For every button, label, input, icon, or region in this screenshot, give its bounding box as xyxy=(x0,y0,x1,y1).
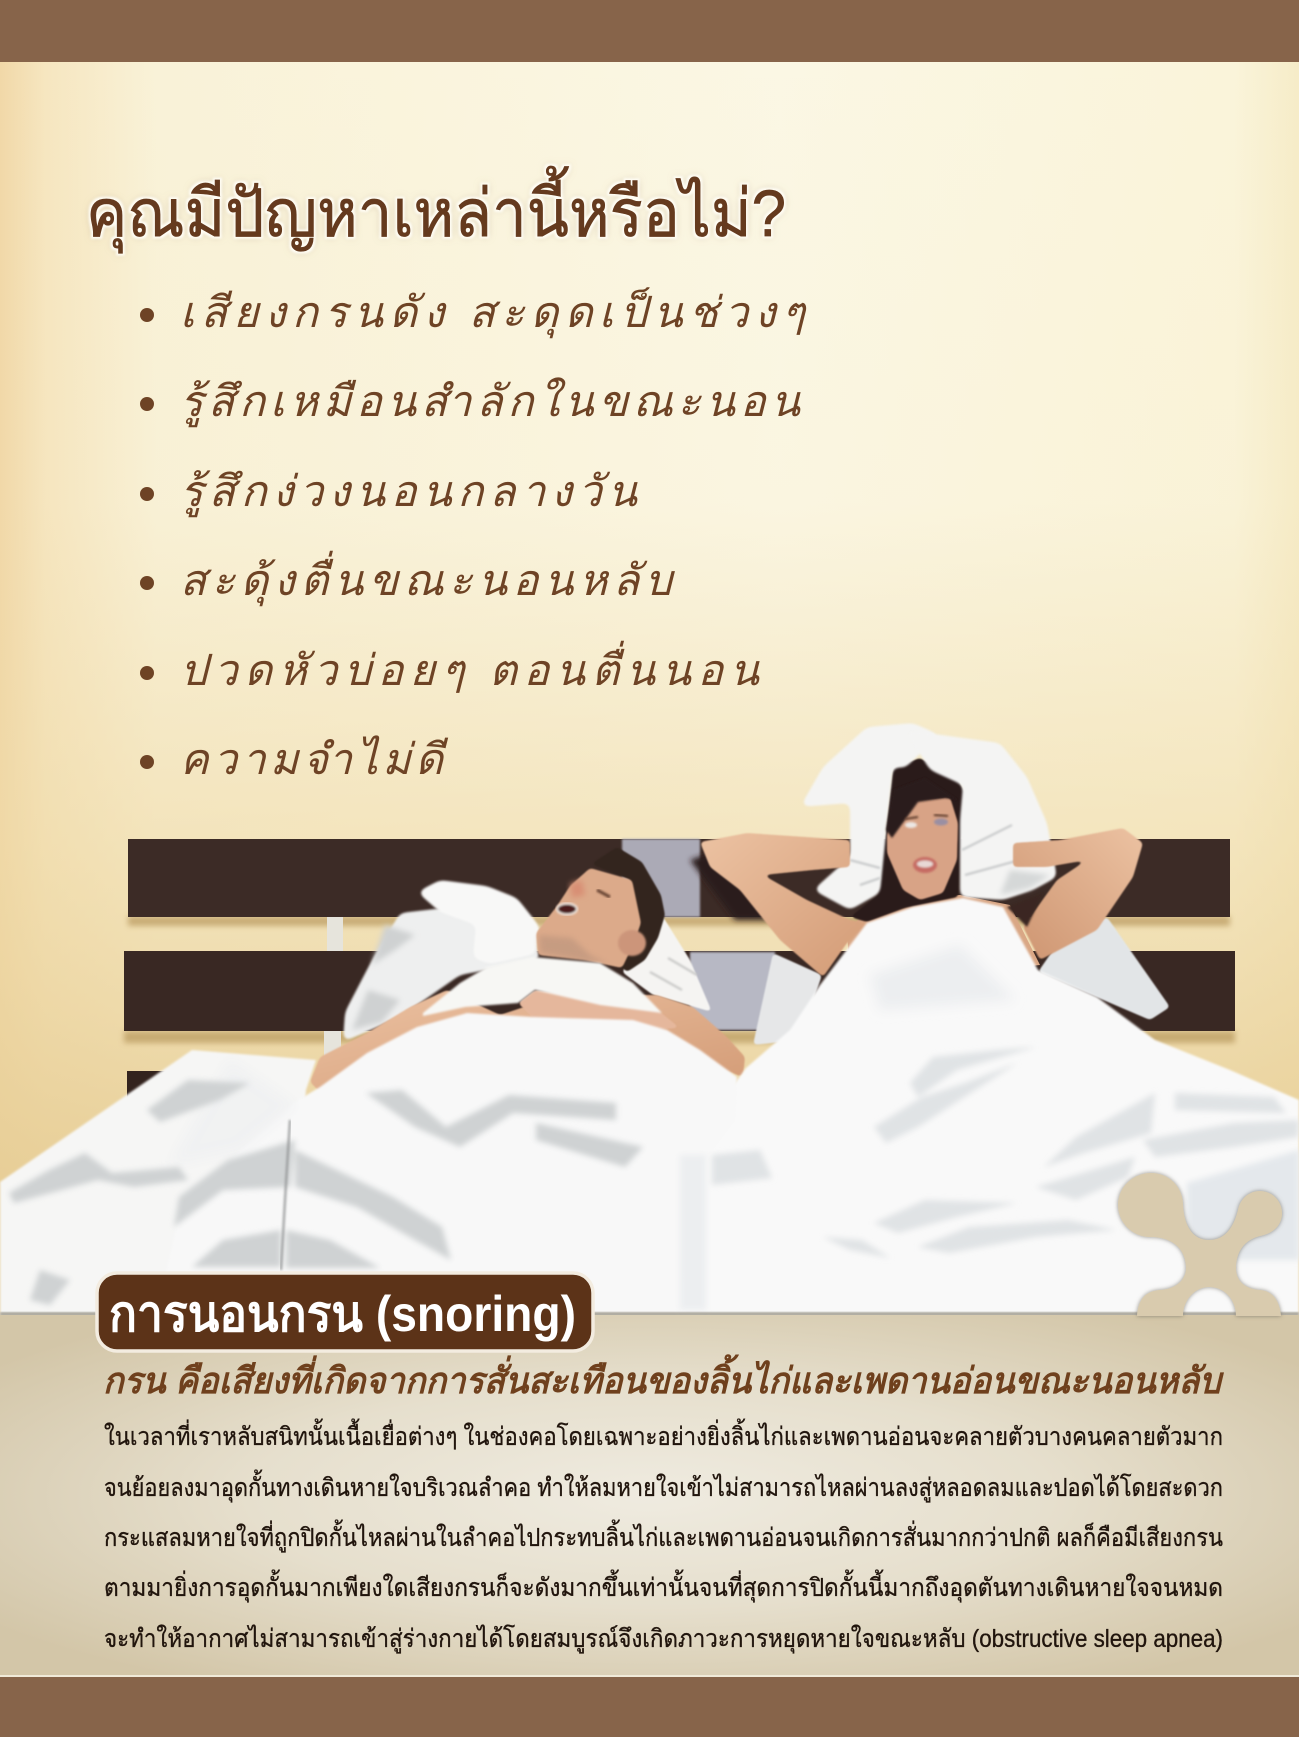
man back pillow xyxy=(343,905,540,1042)
body paragraph xyxy=(104,1418,1223,1654)
woman head pillow left xyxy=(800,723,940,910)
symptom 1: เสียงกรนดัง สะดุดเป็นช่วงๆ xyxy=(180,287,807,339)
woman left arm xyxy=(700,833,867,977)
panel: explanation background xyxy=(0,1315,1299,1677)
man hair xyxy=(591,847,665,972)
headboard slat 3 xyxy=(127,1071,177,1103)
man mouth xyxy=(557,904,577,914)
man right pillow xyxy=(622,912,712,1012)
woman torso xyxy=(847,895,1040,985)
woman mouth xyxy=(913,857,937,873)
headboard posts xyxy=(324,915,343,1058)
wall shadow below slats xyxy=(124,916,1235,1043)
duvet man xyxy=(155,1013,737,1320)
man hand xyxy=(518,990,680,1030)
puzzle cut-out shape xyxy=(1118,1173,1282,1316)
woman back pillows xyxy=(1038,917,1170,1020)
man eye xyxy=(597,890,610,897)
headboard slat 2 xyxy=(124,951,1235,1031)
woman eyes xyxy=(905,815,948,828)
photo bottom shadow line xyxy=(0,1312,1299,1316)
man chest and arm xyxy=(310,990,745,1092)
title: คุณมีปัญหาเหล่านี้หรือไม่? xyxy=(86,166,786,254)
duvet soft shading xyxy=(170,945,1015,1165)
mattress left xyxy=(0,1050,316,1320)
duvet right outer xyxy=(640,898,1299,1320)
subheading: กรน คือเสียงที่เกิดจากการสั่นสะเทือนของลิ้นไก่และเพดานอ่อนขณะนอนหลับ xyxy=(103,1354,1224,1401)
symptom 6: ความจำไม่ดี xyxy=(180,735,449,784)
duvet gray stripes left xyxy=(9,1080,643,1305)
headboard slat 1 reflection xyxy=(622,839,700,917)
woman right arm xyxy=(1013,828,1143,960)
symptoms list xyxy=(140,287,807,784)
symptom 2: รู้สึกเหมือนสำลักในขณะนอน xyxy=(180,377,802,428)
man ear xyxy=(618,930,646,956)
heading badge xyxy=(97,1273,593,1351)
headboard slat 1 xyxy=(128,839,1230,917)
symptom 3: รู้สึกง่วงนอนกลางวัน xyxy=(180,468,639,518)
woman hair back xyxy=(850,758,968,922)
headboard xyxy=(124,839,1235,1103)
symptom 5: ปวดหัวบ่อยๆ ตอนตื่นนอน xyxy=(180,640,761,695)
woman head pillow right xyxy=(905,730,1057,900)
duvet gray stripes right xyxy=(680,1047,1299,1310)
man duvet top xyxy=(423,957,662,1016)
headboard slat 2 reflection xyxy=(690,952,775,1030)
man folded pillow xyxy=(417,880,540,964)
bed and duvets xyxy=(0,898,1299,1320)
illustration: woman covering ears xyxy=(690,723,1170,1045)
illustration: man snoring xyxy=(310,847,745,1092)
woman fringe xyxy=(886,778,958,838)
duvet seam xyxy=(281,1120,290,1270)
woman underarm hair xyxy=(1007,893,1043,927)
bottom brown band xyxy=(0,1677,1299,1737)
wall background xyxy=(0,62,1299,1322)
top brown band xyxy=(0,0,1299,62)
heading badge: การนอนกรน (snoring) xyxy=(109,1286,576,1342)
man face xyxy=(536,868,641,968)
shadow of woman's arm on headboard xyxy=(690,850,770,920)
woman face xyxy=(887,797,958,900)
symptom 4: สะดุ้งตื่นขณะนอนหลับ xyxy=(180,550,676,607)
